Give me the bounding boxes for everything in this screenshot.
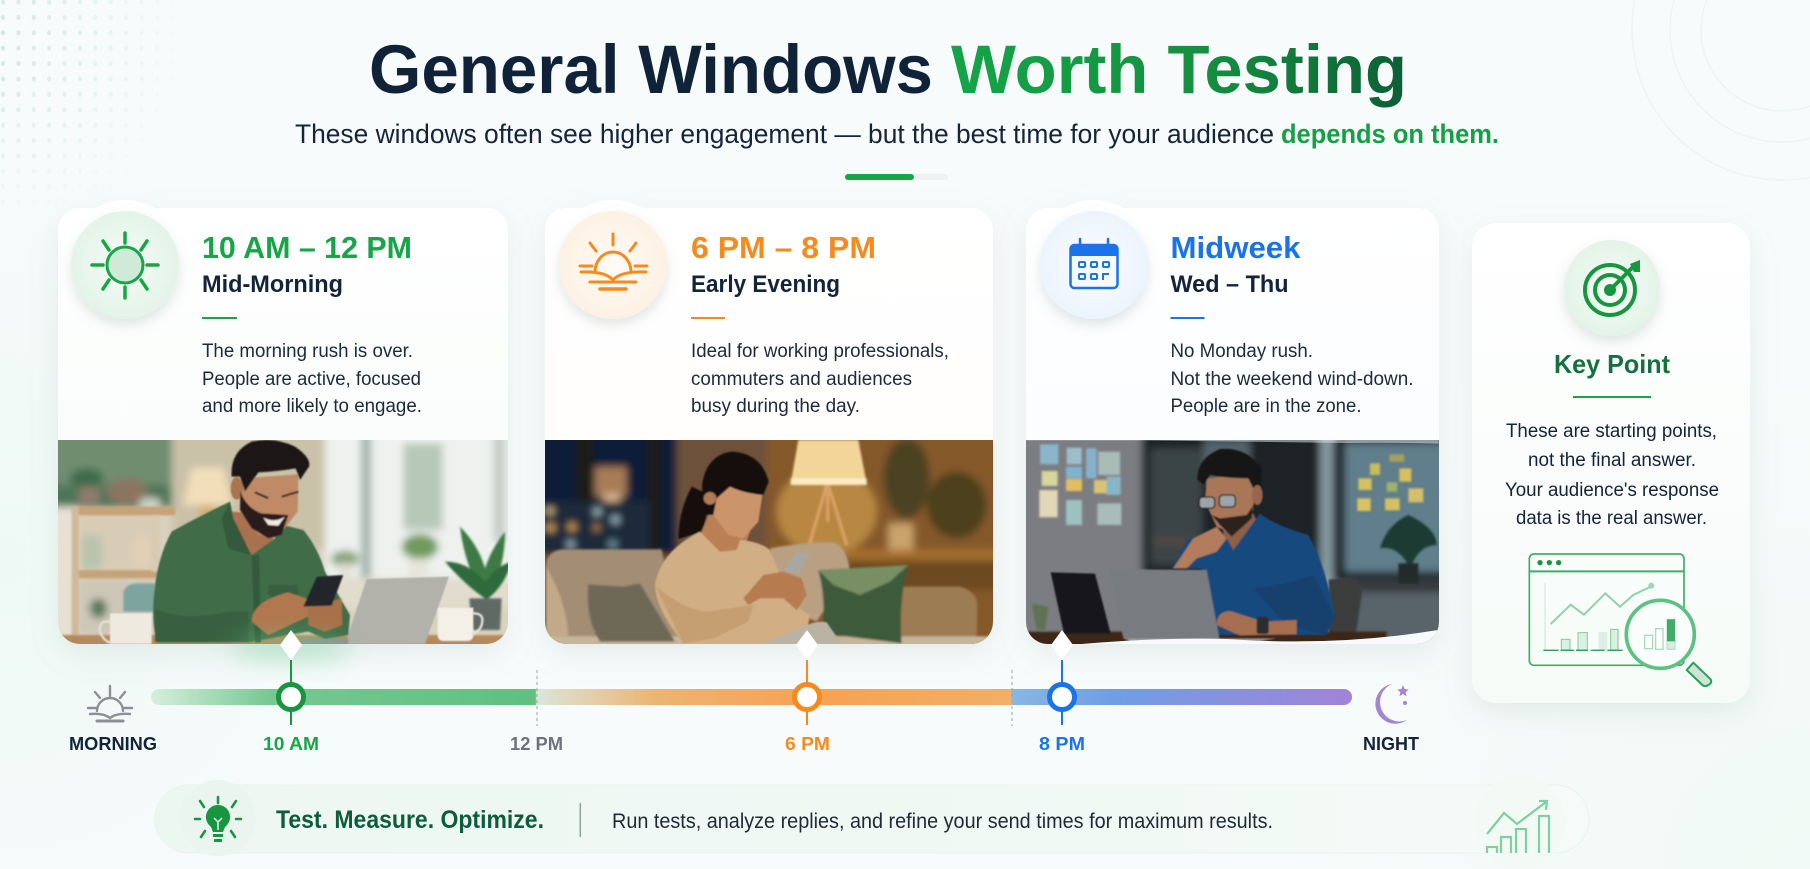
- title accent bar: [845, 174, 948, 180]
- card description: Ideal for working professionals,: [691, 341, 949, 362]
- panel: mid-morning card: [42, 200, 528, 663]
- icon: sunrise: [88, 686, 132, 721]
- card description: The morning rush is over.: [202, 341, 413, 362]
- card description: People are in the zone.: [1170, 396, 1362, 417]
- green glow below first card: [229, 635, 353, 661]
- key point text: [1505, 421, 1719, 529]
- background: [0, 0, 1810, 648]
- card subheading: Mid-Morning: [202, 271, 343, 298]
- title: Worth Testing: [951, 31, 1407, 108]
- woman figure: [655, 452, 842, 644]
- key point text: Your audience's response: [1505, 480, 1719, 501]
- photo: woman on sofa at night: [545, 440, 993, 644]
- icon: calendar: [1040, 211, 1148, 319]
- man figure: [100, 440, 482, 644]
- key point text: These are starting points,: [1506, 421, 1717, 442]
- card description: [202, 341, 422, 417]
- banner divider: [580, 803, 581, 837]
- photo: man with phone in bright room: [58, 440, 508, 644]
- icon: sunset: [559, 211, 667, 319]
- card divider: [691, 317, 725, 319]
- banner: test measure optimize: [154, 780, 1590, 856]
- key point heading: Key Point: [1554, 349, 1670, 379]
- label: morning: MORNING: [69, 734, 157, 754]
- card description: People are active, focused: [202, 369, 421, 390]
- photo: man at laptop in office: [1026, 440, 1439, 644]
- panel: midweek card: [1024, 211, 1440, 656]
- marker: 8 PM: [1050, 630, 1074, 725]
- icon: growth chart: [1486, 784, 1554, 854]
- label: 6 PM: 6 PM: [785, 734, 830, 754]
- label: 10 AM: 10 AM: [263, 734, 319, 754]
- timeline: [69, 630, 1419, 754]
- card description: busy during the day.: [691, 396, 860, 417]
- subtitle: These windows often see higher engagement — but the best time for your audience: [295, 119, 1274, 149]
- 12 PM and boundary ticks: [537, 670, 1012, 726]
- card subheading: Wed – Thu: [1170, 271, 1288, 298]
- card description: [1170, 341, 1414, 417]
- title: General Windows: [369, 31, 933, 108]
- label: 8 PM: 8 PM: [1039, 734, 1085, 754]
- title: [369, 31, 1407, 108]
- marker: 10 AM: [278, 630, 304, 725]
- key point text: data is the real answer.: [1516, 508, 1707, 529]
- icon: moon and stars: [1375, 684, 1409, 724]
- card description: No Monday rush.: [1170, 341, 1313, 362]
- card description: Not the weekend wind-down.: [1170, 369, 1414, 390]
- key point text: not the final answer.: [1528, 450, 1696, 471]
- icon: target with arrow: [1564, 240, 1660, 336]
- label: night: NIGHT: [1363, 734, 1419, 754]
- banner text: Run tests, analyze replies, and refine your send times for maximum results.: [612, 810, 1273, 833]
- icon: dashboard with magnifier: [1529, 554, 1711, 686]
- card divider: [202, 317, 237, 319]
- card heading: Midweek: [1170, 230, 1301, 265]
- card subheading: Early Evening: [691, 271, 840, 298]
- marker: 6 PM: [794, 630, 820, 725]
- card heading: time range: 10 AM – 12 PM: [202, 230, 412, 265]
- panel: key point: [1472, 223, 1750, 703]
- label: 12 PM: 12 PM: [510, 734, 563, 754]
- card heading: time range: 6 PM – 8 PM: [691, 230, 876, 265]
- panel: early-evening card: [544, 211, 994, 656]
- key point divider: [1573, 396, 1651, 398]
- card description: and more likely to engage.: [202, 396, 422, 417]
- card description: commuters and audiences: [691, 369, 912, 390]
- icon: light bulb: [180, 780, 256, 856]
- card divider: [1170, 317, 1204, 319]
- timeline bar: [151, 689, 1352, 705]
- card description: [691, 341, 949, 417]
- man figure: [1051, 449, 1335, 641]
- banner heading: Test. Measure. Optimize.: [276, 806, 544, 834]
- subtitle: depends on them.: [1281, 119, 1499, 149]
- icon: sun: [71, 211, 179, 319]
